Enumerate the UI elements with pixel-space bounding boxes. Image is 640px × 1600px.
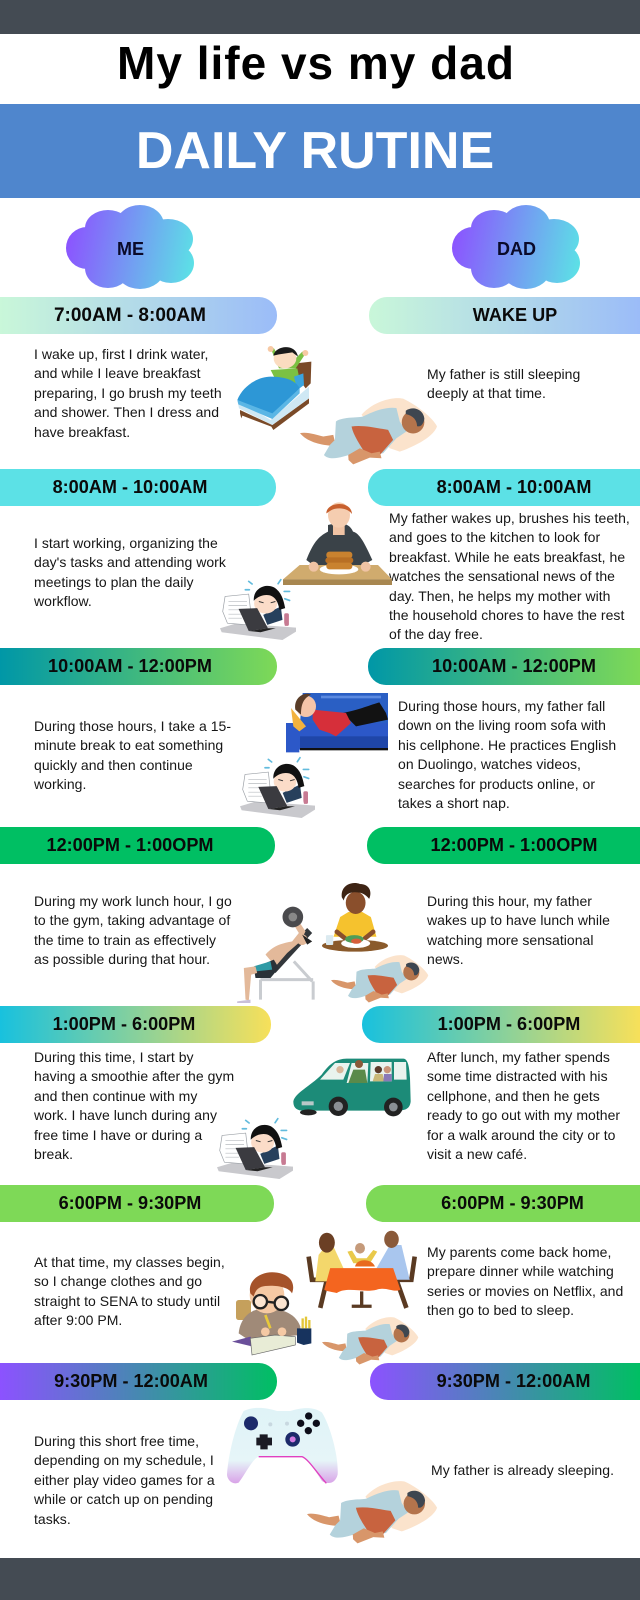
- time pill: 8-10 me: [0, 469, 276, 506]
- text: dad 10-12: his cellphone. He practices English: [398, 737, 616, 753]
- text: dad 12-1: [427, 893, 610, 967]
- text: dad 1-6: [427, 1049, 620, 1162]
- text: me 10-12: [34, 718, 231, 792]
- text: me 10-12: quickly and then continue: [34, 757, 193, 773]
- text: dad 1-6: for a walk around the city or to: [427, 1127, 616, 1143]
- text: dad 8-10: breakfast. While he eats breakfast, he: [389, 549, 625, 565]
- text: dad 1-6: ready to go out with my mother: [427, 1107, 620, 1123]
- text: dad 12-1: watching more sensational: [427, 932, 594, 948]
- text: me 9:30-12: tasks.: [34, 1511, 71, 1527]
- text: me 6-9:30: straight to SENA to study until: [34, 1293, 220, 1309]
- text: dad 10-12: During those hours, my father fall: [398, 698, 605, 714]
- text: dad 6-9:30: prepare dinner while watching: [427, 1263, 614, 1279]
- time pill: 1-6 dad: [362, 1006, 640, 1043]
- text: dad 7-8: My father is still sleeping: [427, 366, 580, 382]
- text: me 6-9:30: so I change clothes and go: [34, 1273, 202, 1289]
- text: me 12-1: to the gym, taking advantage of: [34, 912, 230, 928]
- time pill: 6-9:30 dad: 6:00PM - 9:30PM: [441, 1193, 584, 1213]
- cloud: me: ME: [117, 239, 144, 259]
- time pill: 1-6 me: 1:00PM - 6:00PM: [53, 1014, 195, 1034]
- text: me 8-10: meetings to plan the daily: [34, 574, 194, 590]
- text: me 10-12: minute break to eat something: [34, 737, 223, 753]
- text: me 10-12: During those hours, I take a 15-: [34, 718, 231, 734]
- time pill: 8-10 dad: [368, 469, 640, 506]
- text: me 1-6: free time I have or during a: [34, 1127, 202, 1143]
- time pill: 10-12 dad: [368, 648, 640, 685]
- text: dad 8-10: and goes to the kitchen to look for: [389, 529, 600, 545]
- text: dad 7-8: [427, 366, 580, 401]
- text: me 12-1: During my work lunch hour, I go: [34, 893, 232, 909]
- text: me 6-9:30: after 9:00 PM.: [34, 1312, 122, 1328]
- text: dad 1-6: cellphone, and then he gets: [427, 1088, 600, 1104]
- text: me 9:30-12: [34, 1433, 215, 1527]
- icon: game controller: [227, 1408, 338, 1484]
- text: me 1-6: During this time, I start by: [34, 1049, 194, 1065]
- time pill: wake up: [369, 297, 640, 334]
- time pill: 6-9:30 dad: [366, 1185, 640, 1222]
- cloud: dad: [452, 205, 580, 289]
- text: me 10-12: working.: [34, 776, 86, 792]
- icon: worker at laptop 1: [220, 578, 296, 640]
- banner: daily rutine: DAILY RUTINE: [136, 122, 494, 180]
- text: me 8-10: day's tasks and attending work: [34, 554, 226, 570]
- time pill: 9:30-12 dad: 9:30PM - 12:00AM: [437, 1371, 590, 1391]
- time pill: 6-9:30 me: 6:00PM - 9:30PM: [59, 1193, 201, 1213]
- text: me 8-10: I start working, organizing the: [34, 535, 218, 551]
- icon: sleeping dad 2: [331, 955, 428, 1002]
- text: me 8-10: [34, 535, 226, 609]
- cloud: me: [66, 205, 194, 289]
- time pill: 9:30-12 dad: [370, 1363, 640, 1400]
- text: dad 6-9:30: series or movies on Netflix, and: [427, 1283, 623, 1299]
- time pill: 12-1 me: [0, 827, 275, 864]
- text: dad 12-1: news.: [427, 951, 464, 967]
- time pill: 10-12 me: 10:00AM - 12:00PM: [48, 656, 212, 676]
- text: dad 8-10: the household chores to have the rest: [389, 607, 624, 623]
- text: me 7-8: I wake up, first I drink water,: [34, 346, 208, 362]
- text: dad 8-10: day. Then, he helps my mother with: [389, 588, 610, 604]
- text: me 1-6: having a smoothie after the gym: [34, 1068, 234, 1084]
- text: dad 10-12: [398, 698, 616, 811]
- text: me 7-8: preparing, I go brush my teeth: [34, 385, 222, 401]
- top bar: [0, 0, 640, 34]
- time pill: 9:30-12 me: 9:30PM - 12:00AM: [54, 1371, 208, 1391]
- footer bar: [0, 1558, 640, 1600]
- text: me 9:30-12: During this short free time,: [34, 1433, 199, 1449]
- icon: boy eating a meal: [322, 883, 388, 952]
- time pill: 8-10 dad: 8:00AM - 10:00AM: [437, 477, 591, 497]
- text: dad 1-6: After lunch, my father spends: [427, 1049, 610, 1065]
- text: me 9:30-12: while or catch up on pending: [34, 1491, 213, 1507]
- text: me 1-6: and then continue with my: [34, 1088, 197, 1104]
- text: me 6-9:30: At that time, my classes begin,: [34, 1254, 225, 1270]
- icon: man lying on sofa: [286, 693, 388, 752]
- text: dad 10-12: searches for products online, or: [398, 776, 595, 792]
- text: me 12-1: as possible during that hour.: [34, 951, 210, 967]
- time pill: 6-9:30 me: [0, 1185, 274, 1222]
- time pill: 10-12 me: [0, 648, 277, 685]
- time pill: 1-6 me: [0, 1006, 271, 1043]
- text: dad 10-12: down on the living room sofa with: [398, 717, 606, 733]
- text: me 12-1: the time to train as effectively: [34, 932, 216, 948]
- icon: family at dinner table: [306, 1230, 417, 1309]
- text: dad 12-1: wakes up to have lunch while: [427, 912, 610, 928]
- text: dad 8-10: watches the sensational news of the: [389, 568, 615, 584]
- time pill: 7-8 me: [0, 297, 277, 334]
- time pill: 12-1 me: 12:00PM - 1:00OPM: [47, 835, 213, 855]
- icon: boy waking up in bed: [237, 346, 312, 430]
- icon: worker at laptop 2: [240, 756, 315, 818]
- text: me 8-10: workflow.: [34, 593, 92, 609]
- text: me 9:30-12: depending on my schedule, I: [34, 1452, 214, 1468]
- icon: man eating pancakes: [283, 502, 392, 585]
- text: dad 10-12: on Duolingo, watches videos,: [398, 756, 581, 772]
- icon: man on bench press: [237, 906, 315, 1003]
- icon: family in green van: [293, 1058, 411, 1116]
- text: me 6-9:30: [34, 1254, 225, 1328]
- cloud: dad: DAD: [497, 239, 536, 259]
- time pill: 9:30-12 me: [0, 1363, 277, 1400]
- text: dad 7-8: deeply at that time.: [427, 385, 546, 401]
- text: dad 12-1: During this hour, my father: [427, 893, 592, 909]
- text: me 1-6: work. I have lunch during any: [34, 1107, 217, 1123]
- title: My life vs my dad: [117, 37, 515, 89]
- text: me 7-8: have breakfast.: [34, 424, 130, 440]
- time pill: 8-10 me: 8:00AM - 10:00AM: [53, 477, 207, 497]
- text: dad 1-6: visit a new café.: [427, 1146, 527, 1162]
- text: me 1-6: break.: [34, 1146, 73, 1162]
- text: dad 1-6: some time distracted with his: [427, 1068, 608, 1084]
- text: me 7-8: and while I leave breakfast: [34, 365, 201, 381]
- text: me 7-8: [34, 346, 222, 440]
- text: dad 6-9:30: [427, 1244, 623, 1318]
- time pill: 12-1 dad: 12:00PM - 1:00OPM: [431, 835, 597, 855]
- time pill: 10-12 dad: 10:00AM - 12:00PM: [432, 656, 596, 676]
- text: dad 10-12: takes a short nap.: [398, 795, 510, 811]
- time pill: 12-1 dad: [367, 827, 640, 864]
- text: me 1-6: [34, 1049, 234, 1162]
- icon: sleeping dad 3: [322, 1317, 418, 1364]
- text: dad 8-10: of the day free.: [389, 626, 483, 642]
- text: me 9:30-12: either play video games for a: [34, 1472, 215, 1488]
- text: dad 8-10: My father wakes up, brushes his teeth,: [389, 510, 630, 526]
- text: dad 6-9:30: My parents come back home,: [427, 1244, 611, 1260]
- text: dad 9:30-12: My father is already sleeping.: [431, 1462, 614, 1478]
- banner: daily rutine: [0, 104, 640, 198]
- text: me 7-8: and shower. Then I dress and: [34, 404, 219, 420]
- text: dad 8-10: [389, 510, 630, 642]
- text: dad 6-9:30: then go to bed to sleep.: [427, 1302, 574, 1318]
- time pill: 1-6 dad: 1:00PM - 6:00PM: [438, 1014, 580, 1034]
- icon: sleeping dad 1: [300, 398, 437, 464]
- time pill: 7-8 me: 7:00AM - 8:00AM: [54, 305, 206, 326]
- text: me 12-1: [34, 893, 232, 967]
- time pill: wake up: WAKE UP: [473, 305, 557, 325]
- icon: worker at laptop 3: [217, 1118, 293, 1179]
- icon: student writing: [232, 1272, 312, 1356]
- icon: sleeping dad 4: [307, 1481, 437, 1544]
